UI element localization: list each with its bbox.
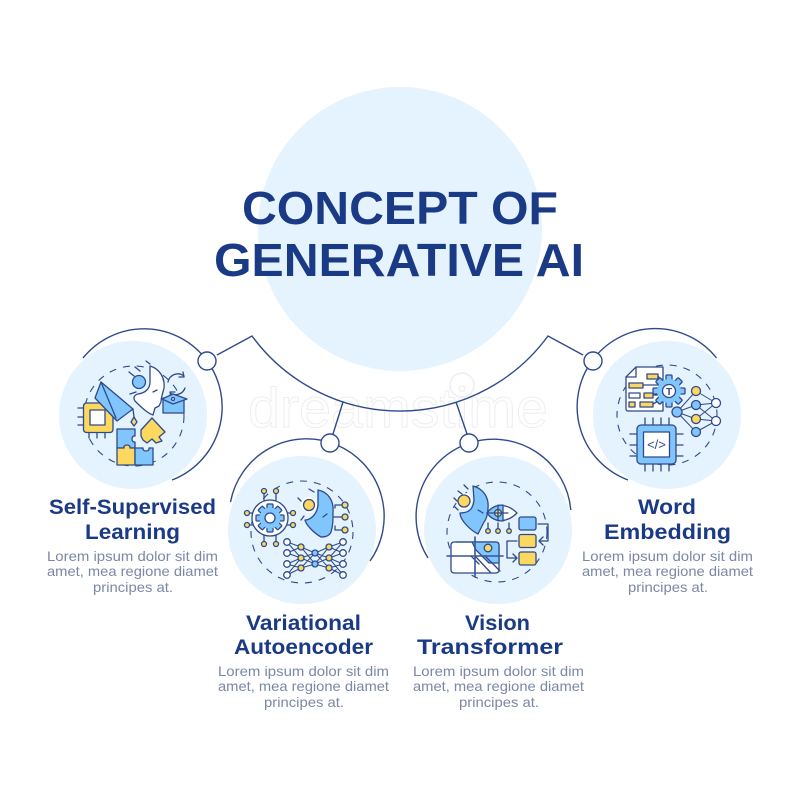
outer ring 3: [416, 439, 571, 558]
heading 2: [234, 612, 373, 659]
text block 3: amet, mea regione diamet: [413, 678, 584, 694]
text block 1: principes at.: [93, 579, 173, 595]
heading 3: Vision: [465, 612, 530, 635]
heading 4: Embedding: [604, 521, 731, 544]
panel: word embedding: [577, 329, 753, 595]
outer ring 4: [577, 329, 716, 480]
text block 1: [47, 548, 218, 595]
title: CONCEPT OF: [242, 182, 558, 234]
text block 2: principes at.: [264, 694, 344, 710]
text block 2: Lorem ipsum dolor sit dim: [218, 663, 389, 679]
panel: vision transformer: [413, 434, 584, 710]
heading 3: Transformer: [417, 636, 563, 659]
node 1: [198, 352, 216, 370]
text block 3: principes at.: [459, 694, 539, 710]
title backdrop circle: [258, 87, 542, 371]
text block 1: Lorem ipsum dolor sit dim: [47, 548, 218, 564]
icon: word embedding: [617, 365, 720, 471]
node 2: [321, 434, 339, 452]
text block 2: [218, 663, 389, 710]
text block 3: Lorem ipsum dolor sit dim: [413, 663, 584, 679]
icon: learning: [78, 361, 187, 466]
panel: self-supervised learning: [47, 329, 222, 595]
text block 3: [413, 663, 584, 710]
heading 1: [49, 496, 216, 544]
text block 4: Lorem ipsum dolor sit dim: [582, 548, 753, 564]
node 3: [460, 434, 478, 452]
title: [214, 182, 584, 286]
heading 4: Word: [638, 496, 696, 519]
icon: word embedding: </>: [647, 437, 666, 452]
title: GENERATIVE AI: [214, 234, 584, 286]
heading 4: [604, 496, 731, 544]
text block 4: principes at.: [628, 579, 708, 595]
heading 2: Autoencoder: [234, 636, 373, 659]
badge 1: [59, 341, 207, 489]
watermark: dreamstime: [248, 376, 548, 439]
panel: variational autoencoder: [218, 434, 389, 710]
heading 1: Self-Supervised: [49, 496, 216, 519]
outer ring 1: [83, 329, 222, 480]
text block 1: amet, mea regione diamet: [47, 563, 218, 579]
icon: autoencoder: [244, 481, 353, 583]
node 4: [584, 352, 602, 370]
text block 4: amet, mea regione diamet: [582, 563, 753, 579]
heading 1: Learning: [85, 521, 180, 544]
badge 4: [593, 341, 741, 489]
badge 3: [424, 456, 572, 604]
badge 2: [228, 456, 376, 604]
text block 4: [582, 548, 753, 595]
outer ring 2: [230, 439, 384, 561]
icon: vision: [447, 482, 548, 582]
icon: word embedding: T: [666, 387, 672, 398]
heading 3: [417, 612, 563, 659]
heading 2: Variational: [246, 612, 361, 635]
connector arc: [217, 336, 583, 434]
text block 2: amet, mea regione diamet: [218, 678, 389, 694]
